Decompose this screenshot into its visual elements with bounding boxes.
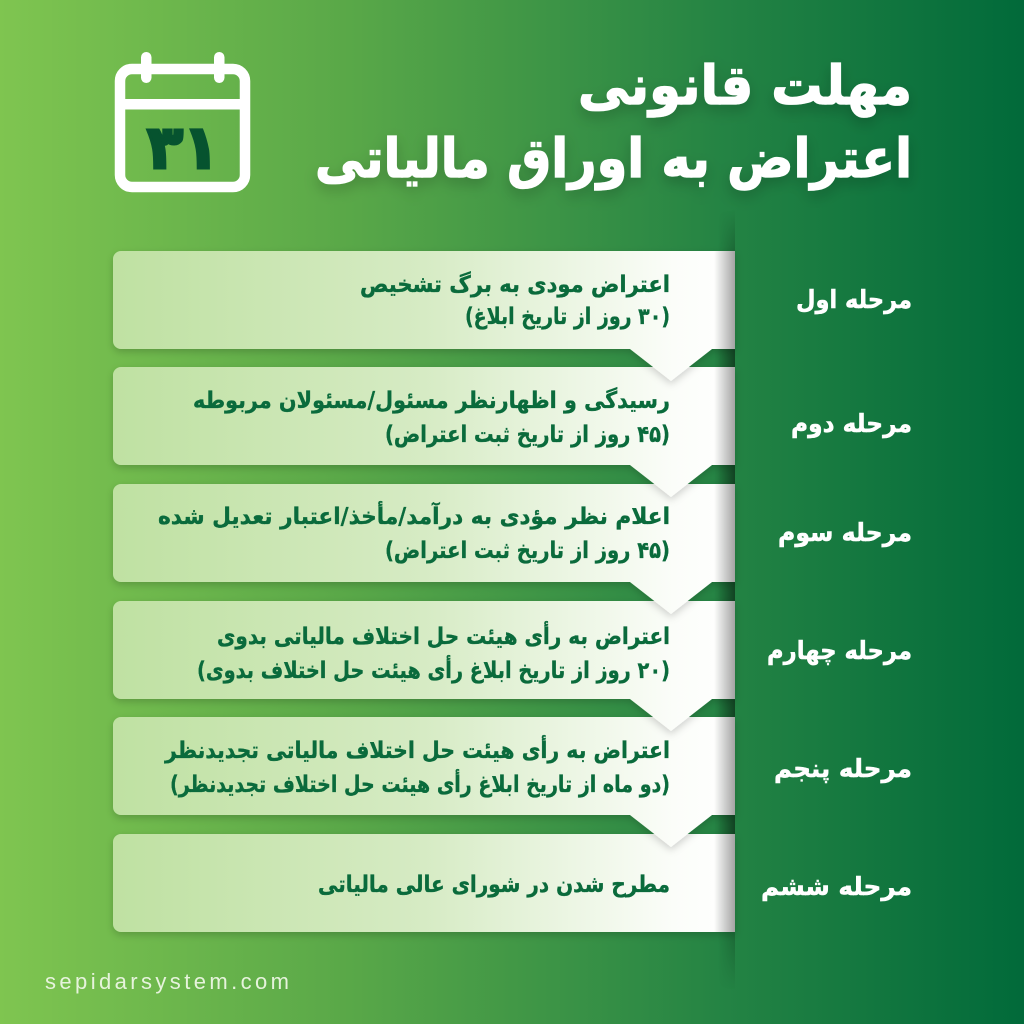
stage labels: مرحله دوم xyxy=(791,409,912,439)
step 5 text: (دو ماه از تاریخ ابلاغ رأی هیئت حل اختلاف تجدیدنظر) xyxy=(170,768,670,798)
title: مهلت قانونی xyxy=(578,54,912,117)
step 4 text: (۲۰ روز از تاریخ ابلاغ رأی هیئت حل اختلاف بدوی) xyxy=(197,654,670,684)
icon: calendar xyxy=(115,52,250,187)
step 1 card xyxy=(113,251,735,381)
footer website: sepidarsystem.com xyxy=(45,969,289,994)
step 2 text: رسیدگی و اظهارنظر مسئول/مسئولان مربوطه xyxy=(193,387,670,414)
step 3 card xyxy=(113,484,735,614)
step 5 card xyxy=(113,717,735,847)
title: اعتراض به اوراق مالیاتی xyxy=(315,127,912,191)
step 3 text: (۴۵ روز از تاریخ ثبت اعتراض) xyxy=(385,538,670,564)
step 6 card xyxy=(113,834,753,932)
step 5 text xyxy=(164,734,670,798)
step 4 text xyxy=(197,620,670,684)
stage labels xyxy=(761,285,912,902)
step 2 text: (۴۵ روز از تاریخ ثبت اعتراض) xyxy=(385,422,670,448)
icon: calendar: ۳۱ xyxy=(147,113,219,183)
step 5 text: اعتراض به رأی هیئت حل اختلاف مالیاتی تجدیدنظر xyxy=(164,734,670,764)
step 3 text xyxy=(158,500,670,564)
step 4 card xyxy=(113,601,735,731)
step 2 card xyxy=(113,367,735,497)
title xyxy=(315,54,912,191)
stage labels: مرحله چهارم xyxy=(767,636,912,666)
step 6 text: مطرح شدن در شورای عالی مالیاتی xyxy=(318,872,670,898)
step 1 text: (۳۰ روز از تاریخ ابلاغ) xyxy=(465,304,670,330)
step 1 text: اعتراض مودی به برگ تشخیص xyxy=(360,271,670,298)
vertical shadow band xyxy=(724,222,735,972)
stage labels: مرحله ششم xyxy=(761,872,912,902)
step 1 text xyxy=(360,271,670,330)
stage labels: مرحله اول xyxy=(796,285,912,315)
step 4 text: اعتراض به رأی هیئت حل اختلاف مالیاتی بدوی xyxy=(217,620,670,650)
stage labels: مرحله سوم xyxy=(778,518,912,548)
stage labels: مرحله پنجم xyxy=(774,754,912,784)
step 2 text xyxy=(193,387,670,448)
right edge shade on cards xyxy=(714,251,735,932)
step 3 text: اعلام نظر مؤدی به درآمد/مأخذ/اعتبار تعدیل شده xyxy=(158,500,670,530)
